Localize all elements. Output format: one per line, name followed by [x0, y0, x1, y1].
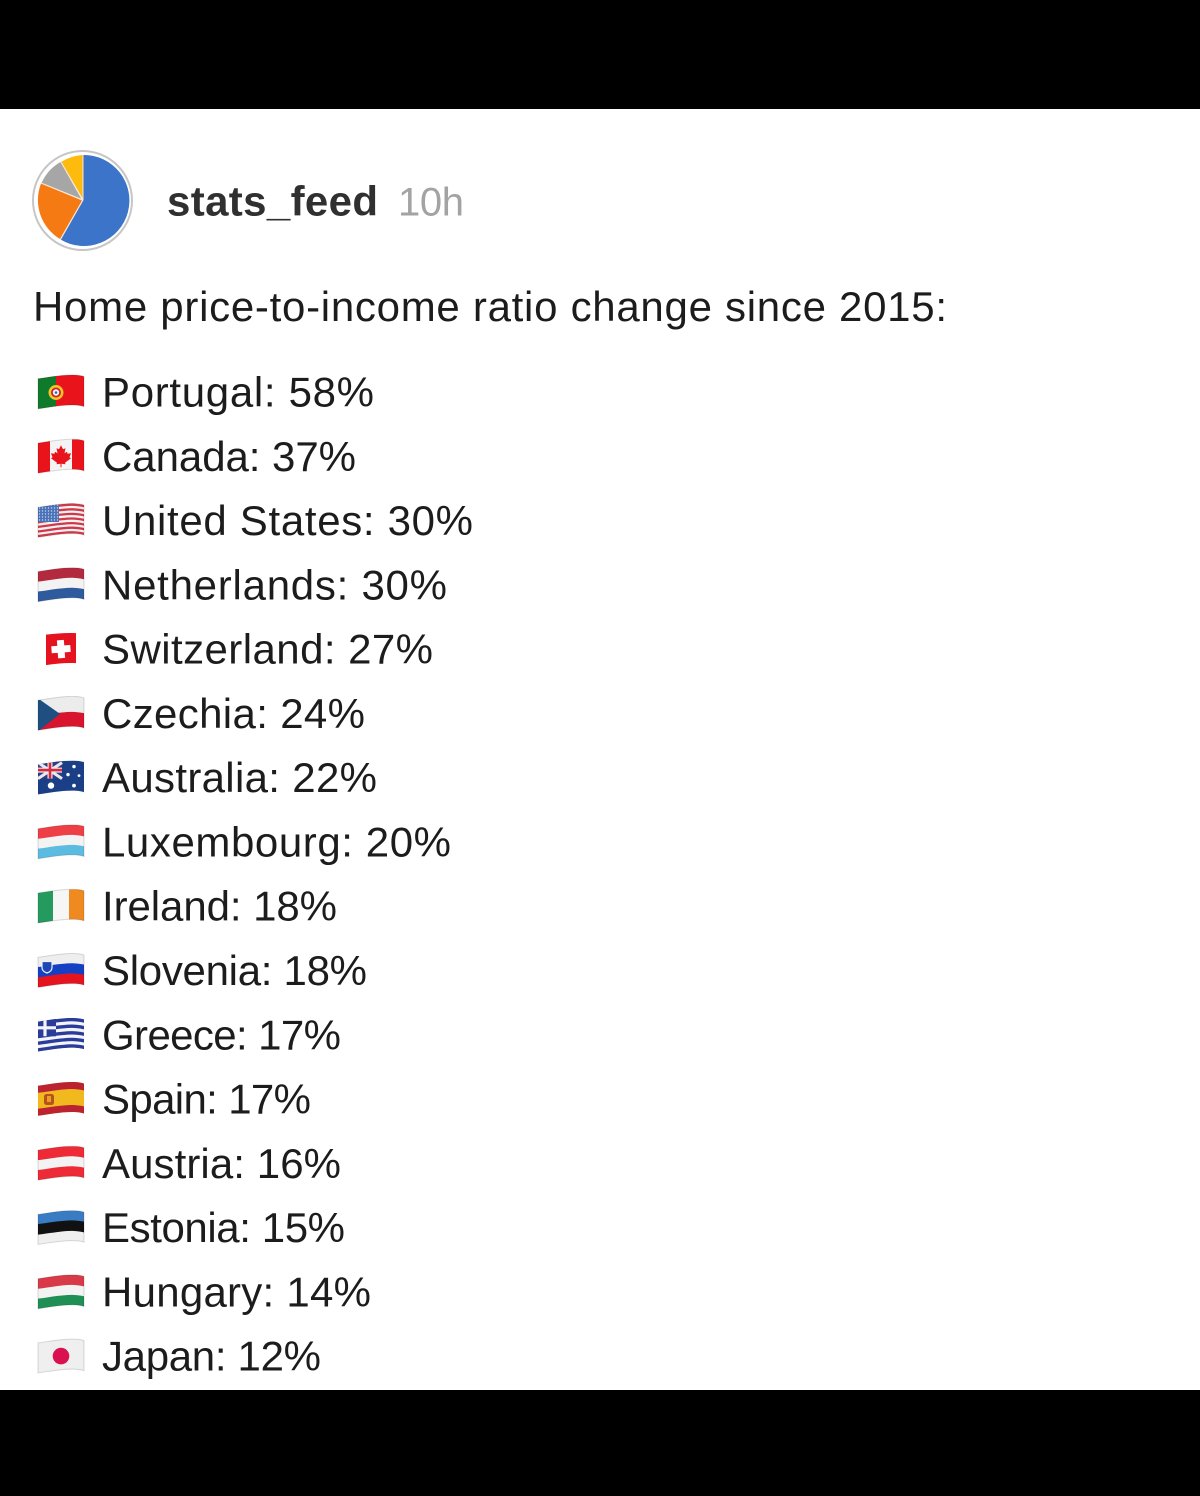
row: Czechia: [38, 696, 364, 731]
row: Spain: [38, 1082, 310, 1122]
icon: flag of Hungary: [36, 1275, 86, 1309]
icon: flag of Switzerland: [46, 632, 76, 666]
row: Estonia: [38, 1210, 344, 1245]
icon: flag of Portugal: [38, 375, 84, 409]
row: Slovenia: Slovenia: 18%: [102, 947, 367, 994]
row: Australia: [38, 760, 376, 794]
post heading: Home price-to-income ratio change since 2015:: [33, 283, 947, 330]
row: Australia: Australia: 22%: [102, 754, 377, 801]
row: Greece: [38, 1018, 340, 1052]
row: Spain: Spain: 17%: [102, 1076, 311, 1122]
black bottom band: [0, 1390, 1200, 1496]
row: Switzerland: Switzerland: 27%: [102, 626, 433, 673]
icon: flag of Australia: [38, 761, 84, 795]
row: Portugal: Portugal: 58%: [102, 368, 374, 416]
icon: flag of Slovenia: [36, 954, 86, 988]
icon: flag of Luxembourg: [36, 825, 86, 859]
row: Austria: [38, 1146, 340, 1181]
icon: flag of Japan: [38, 1339, 84, 1373]
row: Japan: [38, 1338, 320, 1379]
row: Greece: Greece: 17%: [102, 1011, 341, 1058]
row: Slovenia: [38, 953, 366, 988]
row: Hungary: Hungary: 14%: [102, 1268, 371, 1315]
icon: flag of Canada: [38, 439, 84, 473]
icon: flag of Greece: [36, 1018, 86, 1052]
row: Canada: Canada: 37%: [102, 433, 356, 480]
row: Canada: [38, 438, 354, 474]
row: Switzerland: [46, 633, 432, 666]
row: Ireland: [38, 888, 336, 924]
row: Netherlands: [38, 567, 446, 602]
icon: pie chart avatar: [33, 151, 132, 250]
row: Estonia: Estonia: 15%: [102, 1204, 345, 1251]
icon: flag of Austria: [36, 1146, 86, 1180]
row: United States: United States: 30%: [102, 497, 473, 544]
username: stats_feed: [167, 178, 378, 224]
icon: flag of Estonia: [36, 1211, 86, 1245]
row: Ireland: Ireland: 18%: [102, 883, 337, 930]
post age: 10h: [398, 180, 464, 224]
icon: flag of Czechia: [36, 696, 86, 731]
icon: flag of Netherlands: [36, 568, 86, 602]
row: United States: [38, 503, 472, 538]
row: Luxembourg: Luxembourg: 20%: [102, 818, 451, 865]
icon: flag of Spain: [36, 1082, 86, 1116]
row: Japan: Japan: 12%: [102, 1333, 321, 1380]
row: Czechia: Czechia: 24%: [102, 690, 365, 737]
icon: flag of United States: [36, 504, 86, 538]
row: Netherlands: Netherlands: 30%: [102, 561, 447, 608]
row: Austria: Austria: 16%: [102, 1140, 341, 1187]
black top band: [0, 0, 1200, 109]
icon: flag of Ireland: [38, 889, 84, 923]
